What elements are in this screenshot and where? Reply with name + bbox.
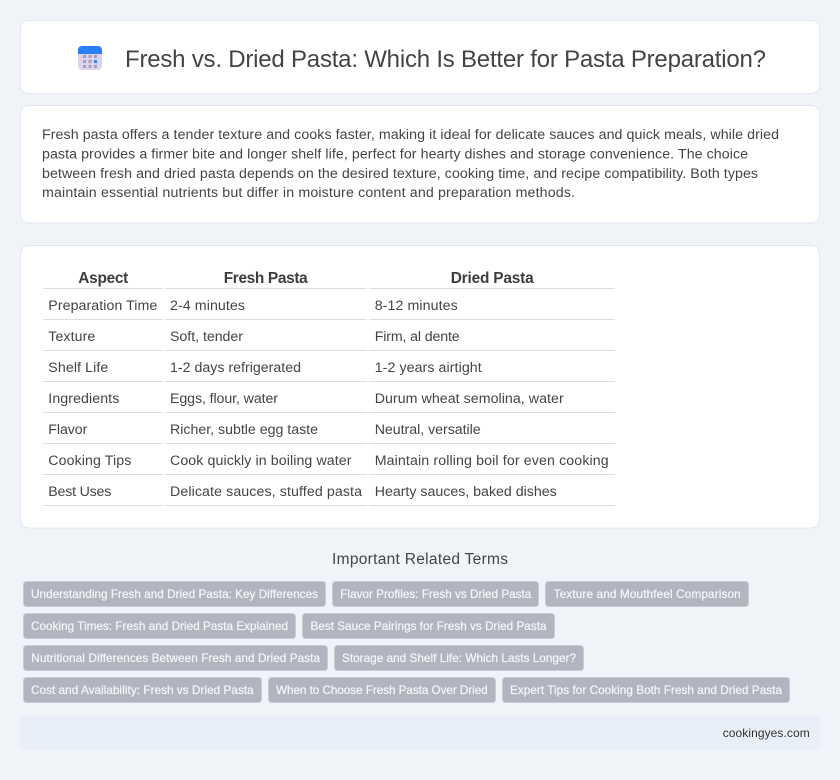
- tag: [24, 582, 326, 606]
- tag: Cost and Availability: Fresh vs Dried Pasta: [31, 684, 254, 697]
- table header row: [78, 270, 534, 287]
- tag: [302, 614, 554, 638]
- intro text: [42, 127, 779, 201]
- tag: [334, 646, 584, 670]
- tag: Understanding Fresh and Dried Pasta: Key Differences: [31, 588, 318, 601]
- source credit: cookingyes.com: [723, 726, 810, 740]
- row: ingredients: Durum wheat semolina, water: [375, 391, 564, 407]
- row: cooking tips: [48, 453, 609, 469]
- row: flavor: Flavor: [48, 422, 88, 438]
- row: texture: Soft, tender: [170, 329, 243, 345]
- intro text: Fresh pasta offers a tender texture and cooks faster, making it ideal for delicate sauces and quick meals, while dried: [42, 127, 779, 143]
- tag: Texture and Mouthfeel Comparison: [554, 588, 741, 601]
- title: Fresh vs. Dried Pasta: Which Is Better for Pasta Preparation?: [125, 46, 766, 73]
- row: preparation time: Preparation Time: [48, 298, 157, 314]
- row: shelf life: 1-2 years airtight: [375, 360, 482, 376]
- row: ingredients: [48, 391, 564, 407]
- row: flavor: [48, 422, 481, 438]
- related terms heading: Important Related Terms: [332, 551, 508, 568]
- row: best uses: Delicate sauces, stuffed pasta: [170, 484, 362, 500]
- tag: Storage and Shelf Life: Which Lasts Longer?: [342, 652, 576, 665]
- tag: [268, 678, 496, 702]
- footer: [20, 716, 820, 750]
- row: texture: Firm, al dente: [375, 329, 460, 345]
- tag: Best Sauce Pairings for Fresh vs Dried Pasta: [310, 620, 547, 633]
- row: texture: Texture: [48, 329, 95, 345]
- row: cooking tips: Cook quickly in boiling water: [170, 453, 352, 469]
- row: best uses: [48, 484, 557, 500]
- row: preparation time: 8-12 minutes: [375, 298, 458, 314]
- tag: Cooking Times: Fresh and Dried Pasta Explained: [31, 620, 288, 633]
- tag: Expert Tips for Cooking Both Fresh and Dried Pasta: [510, 684, 782, 697]
- tag: Flavor Profiles: Fresh vs Dried Pasta: [340, 588, 532, 601]
- tag: [546, 582, 748, 606]
- tag: [24, 646, 328, 670]
- row: ingredients: Eggs, flour, water: [170, 391, 278, 407]
- row: preparation time: [48, 298, 458, 314]
- panel: comparison table: [20, 246, 820, 528]
- row: texture: [48, 329, 460, 345]
- tag: Nutritional Differences Between Fresh and Dried Pasta: [31, 652, 320, 665]
- row: best uses: Best Uses: [48, 484, 111, 500]
- intro text: maintain essential nutrients but differ in moisture content and preparation methods.: [42, 185, 575, 201]
- tag: [24, 614, 296, 638]
- table header row: Dried Pasta: [451, 270, 534, 287]
- row: preparation time: 2-4 minutes: [170, 298, 245, 314]
- row: best uses: Hearty sauces, baked dishes: [375, 484, 557, 500]
- related terms tags: [24, 582, 790, 702]
- panel: introduction: [20, 106, 820, 223]
- tag: [332, 582, 538, 606]
- tag: [502, 678, 790, 702]
- row: shelf life: Shelf Life: [48, 360, 108, 376]
- row: cooking tips: Maintain rolling boil for even cooking: [375, 453, 609, 469]
- panel: header: [20, 20, 820, 94]
- row: flavor: Neutral, versatile: [375, 422, 481, 438]
- row: shelf life: 1-2 days refrigerated: [170, 360, 301, 376]
- tag: [24, 678, 262, 702]
- row: ingredients: Ingredients: [48, 391, 119, 407]
- row: cooking tips: Cooking Tips: [48, 453, 131, 469]
- tag: When to Choose Fresh Pasta Over Dried: [276, 684, 488, 697]
- row: flavor: Richer, subtle egg taste: [170, 422, 318, 438]
- intro text: pasta provides a firmer bite and longer shelf life, perfect for hearty dishes and storage convenience. The choice: [42, 146, 748, 162]
- table header row: Aspect: [78, 270, 128, 287]
- row: shelf life: [48, 360, 482, 376]
- icon: calendar grid: [78, 46, 102, 70]
- table header row: Fresh Pasta: [224, 270, 308, 287]
- intro text: between fresh and dried pasta depends on the desired texture, cooking time, and recipe compatibility. Both types: [42, 166, 758, 182]
